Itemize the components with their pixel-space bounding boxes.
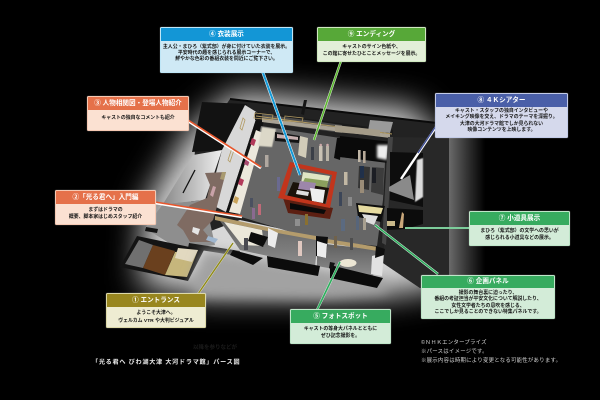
callout 7 props [469,211,570,246]
callout 2 intro: まずはドラマの [88,208,123,212]
callout 9 ending [317,27,426,62]
callout 4 costume display: 主人公・まひろ（紫式部）が身に付けていた衣装を展示。 [163,44,290,50]
callout 1 entrance [106,293,206,328]
copyright notes: ※展示内容は時期により変更となる可能性があります。 [421,358,561,364]
callout 9 ending: ⑨ エンディング [348,31,395,38]
callout 3 character relationships: キャストの独自なコメントも紹介 [101,116,175,121]
leader line: 9 ending [314,61,341,140]
leader line: 5 photo spot [317,262,340,310]
outer building volumes [190,99,449,288]
copyright notes: ©ＮＨＫエンタープライズ [421,340,487,346]
leader line: 8 theatre [401,126,436,179]
visitor figures [244,144,376,256]
callout 4 costume display: ④ 衣装展示 [209,31,244,38]
main grey floor [238,126,385,246]
callout 6 special panels: 撮影の舞台裏に迫ったり、 [459,291,517,296]
callout 4 costume display [160,27,293,73]
leader line: 1 entrance [198,243,233,294]
callout 8 4K theatre: 映像コンテンツを上映します。 [468,128,535,133]
background glow [140,92,485,296]
callout 5 photo spot: キャストの等身大パネルとともに [304,326,377,332]
leader line: 4 costume [262,70,300,175]
leader line: 2 intro [155,202,242,217]
callout 6 special panels: ⑥ 企画パネル [467,278,509,285]
panel corner 6 [356,203,385,225]
callout 4 costume display: 鮮やかな色彩の番組衣装を間近にご覧下さい。 [175,57,278,62]
props room [387,208,423,230]
callout 2 intro [55,190,156,225]
callout 7 props: まひろ（紫式部）の文学への思いが [480,228,559,234]
leader line: 3 characters [188,120,261,168]
callout 8 4K theatre: ⑧ ４Ｋシアター [478,97,526,104]
bottom grey apron [190,250,388,298]
callout 7 props: 感じられる小道具などの展示。 [485,236,554,241]
callout 2 intro: 概要、脚本家はじめスタッフ紹介 [69,215,142,220]
callout 5 photo spot: ⑤ フォトスポット [313,313,368,320]
callout 1 entrance: ヴェルカム VTR や大判ビジュアル [118,318,194,324]
title: 「光る君へ びわ湖大津 大河ドラマ館」パース図 [92,359,240,366]
entrance room [120,227,204,281]
callout 6 special panels: 女性文学者たちの息吹を感じる、 [451,304,525,309]
callout 7 props: ⑦ 小道具展示 [499,215,540,222]
red frame central display [278,162,337,219]
pink carpet corridor [177,172,240,256]
copyright notes [421,339,561,364]
4K theatre [389,152,423,207]
callout 6 special panels [421,275,555,319]
callout 8 4K theatre: メイキング映像を交え、ドラマのテーマを深掘り。 [445,115,558,120]
callout 6 special panels: ここでしか見ることのできない特集パネルです。 [434,310,542,315]
callout 9 ending: キャストのサイン色紙や、 [342,44,401,50]
left display wall [229,127,308,214]
callout 5 photo spot [290,309,391,344]
callout 5 photo spot: ぜひ記念撮影を。 [321,334,360,339]
callout 1 entrance: ① エントランス [132,297,180,304]
callout 3 character relationships: ③ 人物相関図・登場人物紹介 [94,100,182,107]
callout 9 ending: この館に寄せたひとことメッセージを展示。 [323,52,420,56]
callout 3 character relationships [87,96,189,131]
faint note: 以降を参りなどが [193,345,237,351]
callout 1 entrance: ようこそ大津へ。 [136,310,176,316]
copyright notes: ※パースはイメージです。 [421,349,488,355]
callout 8 4K theatre: 大津の大河ドラマ館でしか見られない [460,122,543,127]
leader line: 7 props [405,227,470,229]
back wall and railing [228,100,393,162]
callout 8 4K theatre: キャスト・スタッフの独自インタビューや [455,109,548,114]
callout 6 special panels: 番組の考証担当が平安文化について解説したり、 [434,297,542,302]
callout 2 intro: ②「光る君へ」入門編 [73,194,138,201]
lower hall floor [215,216,385,276]
bottom black walls [230,250,383,288]
left lobby floor [145,105,265,250]
callout 4 costume display: 平安時代の趣を感じられる展示コーナーで、 [178,51,275,56]
leader line: 6 panels [375,225,438,274]
right room back wall [334,125,393,245]
callout 8 4K theatre [435,93,568,138]
